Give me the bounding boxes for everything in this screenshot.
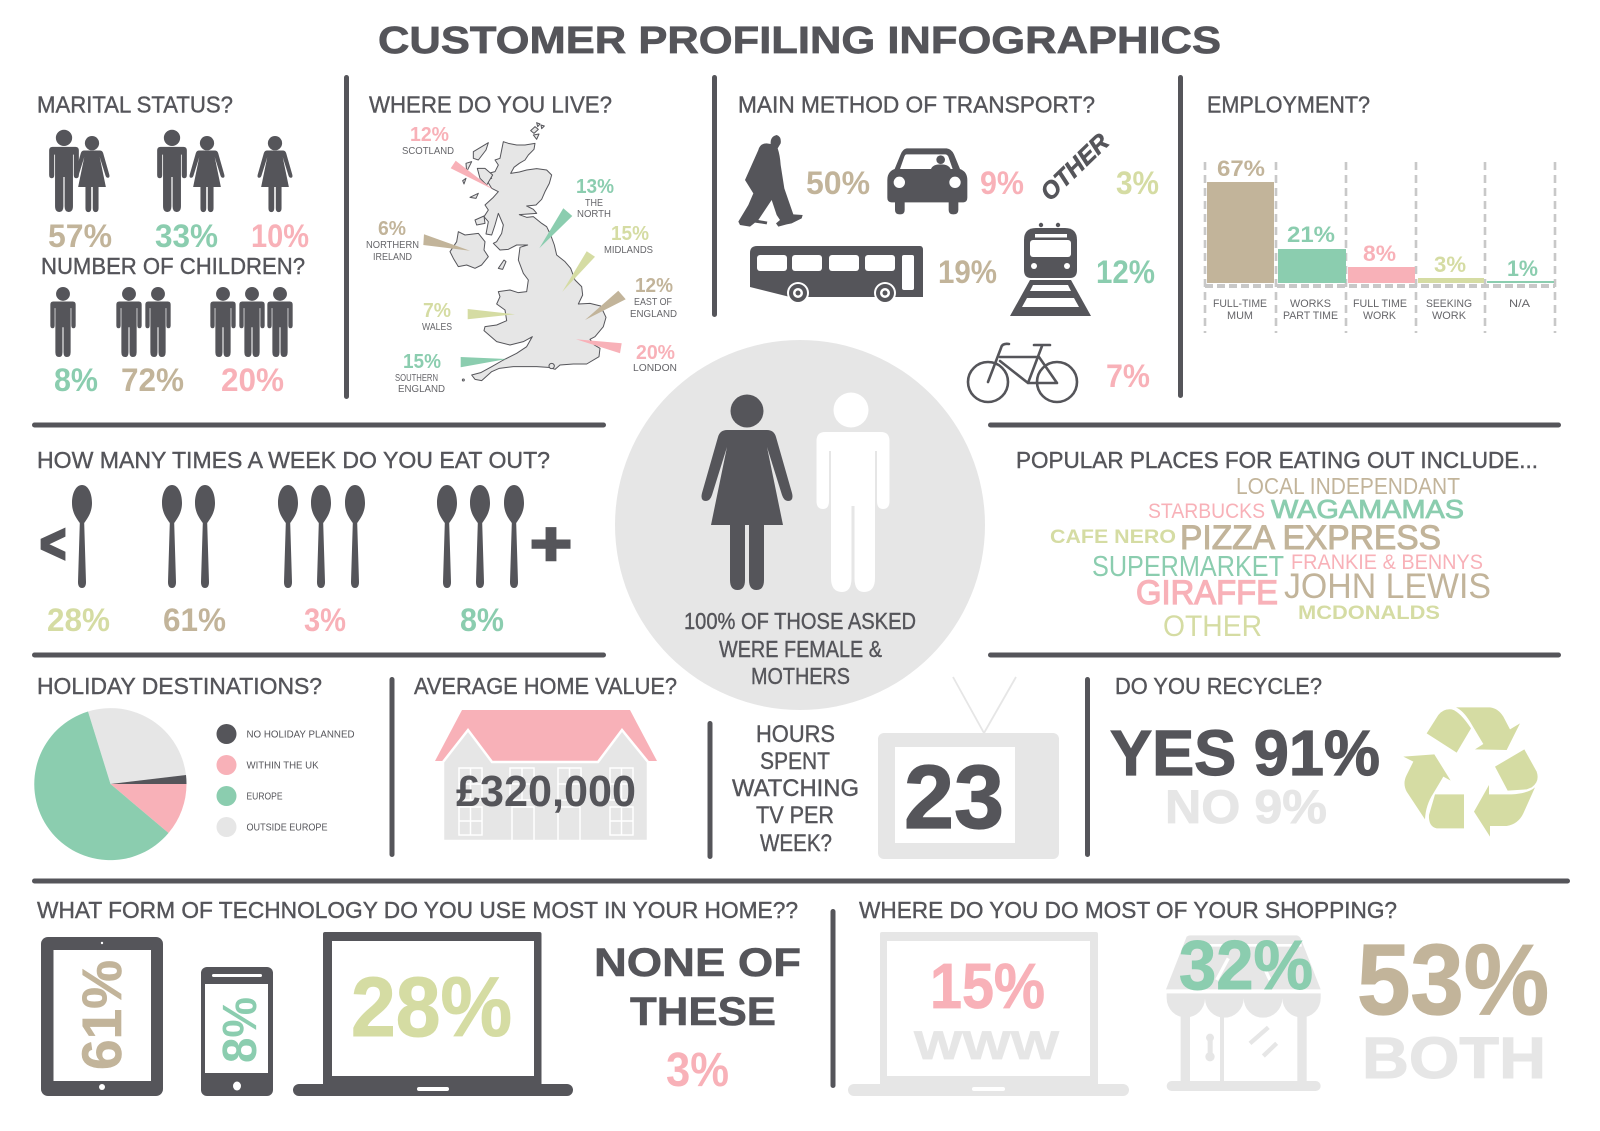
icon: house xyxy=(435,710,657,843)
arrow: wales xyxy=(468,309,515,319)
caption: MOTHERS xyxy=(751,663,850,689)
panel: technology xyxy=(37,897,801,1097)
icon: phone xyxy=(201,967,273,1096)
axis labels: SEEKING xyxy=(1426,298,1472,310)
axis labels: WORKS xyxy=(1290,298,1331,310)
pie chart xyxy=(34,708,187,860)
icon: three spoons plus xyxy=(437,485,524,588)
label: east of england: 12% xyxy=(635,275,673,297)
stat: 8%: 8% xyxy=(460,602,504,638)
axis labels xyxy=(1213,298,1531,322)
stat: online 15%: 15% xyxy=(930,950,1045,1022)
stat: car 9%: 9% xyxy=(980,165,1024,201)
arrow: east of england xyxy=(585,291,626,320)
axis labels: N/A xyxy=(1509,298,1531,310)
icon: one child xyxy=(50,287,76,357)
arrow: northern ireland xyxy=(423,234,470,251)
stat: 1%: 1% xyxy=(1507,256,1538,281)
icon: woman xyxy=(702,394,792,590)
arrow: southern england xyxy=(461,357,507,367)
axis labels: WORK xyxy=(1432,310,1467,322)
stat: none 3%: 3% xyxy=(666,1044,729,1097)
heading: holiday: HOLIDAY DESTINATIONS? xyxy=(37,673,322,699)
panel: recycling xyxy=(1110,673,1538,837)
icon: laptop xyxy=(293,932,573,1096)
icon: bicycle xyxy=(968,344,1077,402)
arrow: midlands xyxy=(562,251,595,292)
icon: shop xyxy=(1166,935,1321,1091)
label: the north: NORTH xyxy=(577,208,611,220)
heading: technology: WHAT FORM OF TECHNOLOGY DO YOU USE MOST IN YOUR HOME?? xyxy=(37,897,798,923)
label: southern england: ENGLAND xyxy=(398,383,445,395)
arrow: london xyxy=(576,339,622,353)
panel: shopping xyxy=(848,897,1549,1096)
axis labels: FULL-TIME xyxy=(1213,298,1267,310)
icon: two spoons xyxy=(162,485,215,588)
panel: holiday destinations xyxy=(34,673,355,860)
label: northern ireland: 6% xyxy=(378,218,406,240)
stat: 28%: 28% xyxy=(47,602,110,638)
caption: 100% OF THOSE ASKED xyxy=(684,608,916,634)
word cloud: MCDONALDS xyxy=(1298,603,1440,624)
word cloud: OTHER xyxy=(1163,610,1262,643)
axis labels: FULL TIME xyxy=(1353,298,1407,310)
stat: bicycle 7%: 7% xyxy=(1106,358,1150,394)
panel: central circle xyxy=(615,340,985,710)
stat: no 9%: NO 9% xyxy=(1165,780,1327,833)
stat: other 3%: 3% xyxy=(1116,165,1159,201)
panel: main method of transport xyxy=(738,92,1159,402)
label: northern ireland: NORTHERN xyxy=(366,239,419,251)
arrow: the north xyxy=(539,208,572,248)
icon: one spoon xyxy=(72,485,92,588)
word cloud: PIZZA EXPRESS xyxy=(1180,519,1441,557)
heading: popular places: POPULAR PLACES FOR EATING OUT INCLUDE... xyxy=(1016,447,1538,473)
stat: walking 50%: 50% xyxy=(806,165,870,201)
word cloud: STARBUCKS xyxy=(1148,500,1265,523)
label: northern ireland xyxy=(366,218,419,263)
icon: recycling arrows xyxy=(1403,707,1538,837)
plus sign: + xyxy=(530,510,572,579)
word cloud: FRANKIE & BENNYS xyxy=(1291,551,1483,574)
icon: three children xyxy=(210,287,293,357)
legend: OUTSIDE EUROPE xyxy=(246,822,328,834)
bar: full-time mum 67% xyxy=(1207,182,1274,283)
stat: 8%: 8% xyxy=(54,362,98,398)
stat: in store 32%: 32% xyxy=(1179,926,1313,1004)
icon: grey laptop xyxy=(848,932,1129,1096)
icon: television xyxy=(878,677,1059,859)
stat: phone 8%: 8% xyxy=(214,997,267,1063)
icon: two children xyxy=(116,287,171,357)
label: wales: WALES xyxy=(422,321,452,333)
label: london: LONDON xyxy=(633,362,677,374)
icon: walkers xyxy=(738,135,803,227)
label: the north: THE xyxy=(585,197,603,209)
label: northern ireland: IRELAND xyxy=(373,251,412,263)
icon: single woman xyxy=(257,136,293,212)
label: midlands: 15% xyxy=(611,223,649,245)
label: southern england: SOUTHERN xyxy=(395,372,438,384)
axis labels: MUM xyxy=(1227,310,1253,322)
icon: tablet xyxy=(41,937,163,1096)
word cloud: JOHN LEWIS xyxy=(1284,567,1491,606)
question text: SPENT xyxy=(760,748,830,775)
label: wales: 7% xyxy=(423,300,451,322)
caption xyxy=(684,608,916,689)
label: the north xyxy=(576,176,614,220)
question text: TV PER xyxy=(756,802,834,829)
panel: tv hours xyxy=(732,677,1059,859)
bar chart: employment xyxy=(1205,162,1555,333)
background circle xyxy=(615,340,985,710)
stat: laptop 28%: 28% xyxy=(351,960,512,1054)
panel: employment xyxy=(1205,92,1555,333)
less than sign: < xyxy=(40,514,66,574)
stat: 21%: 21% xyxy=(1287,222,1335,247)
panel: popular places word cloud xyxy=(1016,447,1538,643)
label: www: WWW xyxy=(914,1024,1059,1068)
question text: HOURS xyxy=(756,721,835,748)
stat: tablet 61%: 61% xyxy=(70,960,133,1070)
heading: marital status: MARITAL STATUS? xyxy=(37,92,233,118)
stat: 57%: 57% xyxy=(48,218,112,254)
label: the north: 13% xyxy=(576,176,614,198)
label: scotland: 12% xyxy=(410,124,449,146)
legend xyxy=(216,724,355,837)
word cloud: SUPERMARKET xyxy=(1092,551,1284,583)
stat: 72%: 72% xyxy=(121,362,184,398)
stat: 67%: 67% xyxy=(1217,156,1265,181)
heading: shopping: WHERE DO YOU DO MOST OF YOUR SHOPPING? xyxy=(859,897,1397,923)
stat: bus 19%: 19% xyxy=(938,254,997,290)
heading: home value: AVERAGE HOME VALUE? xyxy=(414,673,677,699)
label: other: OTHER xyxy=(1035,128,1115,206)
icon: three spoons xyxy=(278,485,365,588)
question text: WEEK? xyxy=(760,830,832,857)
legend: WITHIN THE UK xyxy=(246,760,318,772)
bar: full time work 8% xyxy=(1348,267,1415,283)
label: midlands: MIDLANDS xyxy=(604,244,653,256)
stat: train 12%: 12% xyxy=(1096,254,1155,290)
label: southern england: 15% xyxy=(403,351,441,373)
icon: bus xyxy=(750,246,923,304)
axis labels: WORK xyxy=(1363,310,1397,322)
label: both: BOTH xyxy=(1362,1026,1546,1091)
question text: WATCHING xyxy=(732,775,859,802)
stat: 8%: 8% xyxy=(1363,241,1396,266)
legend: NO HOLIDAY PLANNED xyxy=(246,728,355,740)
label: east of england xyxy=(630,275,677,320)
label: southern england xyxy=(395,351,445,395)
arrow: scotland xyxy=(451,161,493,189)
heading: eat out: HOW MANY TIMES A WEEK DO YOU EAT OUT? xyxy=(37,447,550,473)
label: east of england: EAST OF xyxy=(634,296,672,308)
stat: 33%: 33% xyxy=(155,218,218,254)
icon: car xyxy=(887,148,967,214)
word cloud xyxy=(1050,473,1491,643)
label: none of these: THESE xyxy=(630,990,776,1034)
bar: seeking work 3% xyxy=(1418,278,1484,283)
map: united kingdom xyxy=(450,123,606,381)
icon: train xyxy=(1010,223,1091,316)
value: £320,000 xyxy=(456,767,636,816)
label: wales xyxy=(422,300,452,333)
axis labels: PART TIME xyxy=(1283,310,1338,322)
caption: WERE FEMALE & xyxy=(719,636,882,662)
stat: yes 91%: YES 91% xyxy=(1110,717,1380,789)
heading: recycle: DO YOU RECYCLE? xyxy=(1115,673,1322,699)
panel: marital status and children xyxy=(37,92,309,398)
label: none of these xyxy=(594,941,801,1034)
stat: 61%: 61% xyxy=(163,602,226,638)
icon: couple 33% xyxy=(157,130,225,212)
word cloud: LOCAL INDEPENDANT xyxy=(1236,473,1460,499)
slice: within the uk xyxy=(110,784,186,833)
bar: n/a 1% xyxy=(1487,281,1554,283)
label: scotland xyxy=(402,124,454,157)
word cloud: WAGAMAMAS xyxy=(1271,494,1464,524)
bar: works part time 21% xyxy=(1278,249,1346,283)
stat: both 53%: 53% xyxy=(1357,924,1549,1036)
slice: outside europe xyxy=(88,708,186,784)
panel: where do you live xyxy=(366,92,677,395)
panel: average home value xyxy=(414,673,677,843)
slice: no holiday planned xyxy=(110,775,187,784)
stat: 20%: 20% xyxy=(221,362,284,398)
label: london xyxy=(633,342,677,374)
heading: transport: MAIN METHOD OF TRANSPORT? xyxy=(738,92,1095,118)
label: none of these: NONE OF xyxy=(594,941,801,985)
stat: 10%: 10% xyxy=(251,218,309,254)
panel: eating out frequency xyxy=(37,447,572,638)
title: CUSTOMER PROFILING INFOGRAPHICS xyxy=(378,20,1221,62)
legend: EUROPE xyxy=(246,790,282,802)
slice: europe xyxy=(34,712,168,860)
heading: number of children: NUMBER OF CHILDREN? xyxy=(41,253,305,279)
word cloud: CAFE NERO xyxy=(1050,527,1176,548)
label: scotland: SCOTLAND xyxy=(402,145,454,157)
stat: 3%: 3% xyxy=(1434,252,1466,277)
icon: man xyxy=(816,392,890,592)
heading: where do you live: WHERE DO YOU LIVE? xyxy=(369,92,612,118)
question text xyxy=(732,721,859,857)
label: london: 20% xyxy=(636,342,675,364)
label: east of england: ENGLAND xyxy=(630,308,677,320)
heading: employment: EMPLOYMENT? xyxy=(1207,92,1370,118)
icon: couple 57% xyxy=(49,130,110,212)
value: 23 hours: 23 xyxy=(904,748,1004,848)
label: midlands xyxy=(604,223,653,256)
word cloud: GIRAFFE xyxy=(1136,574,1278,612)
stat: 3%: 3% xyxy=(304,602,346,638)
